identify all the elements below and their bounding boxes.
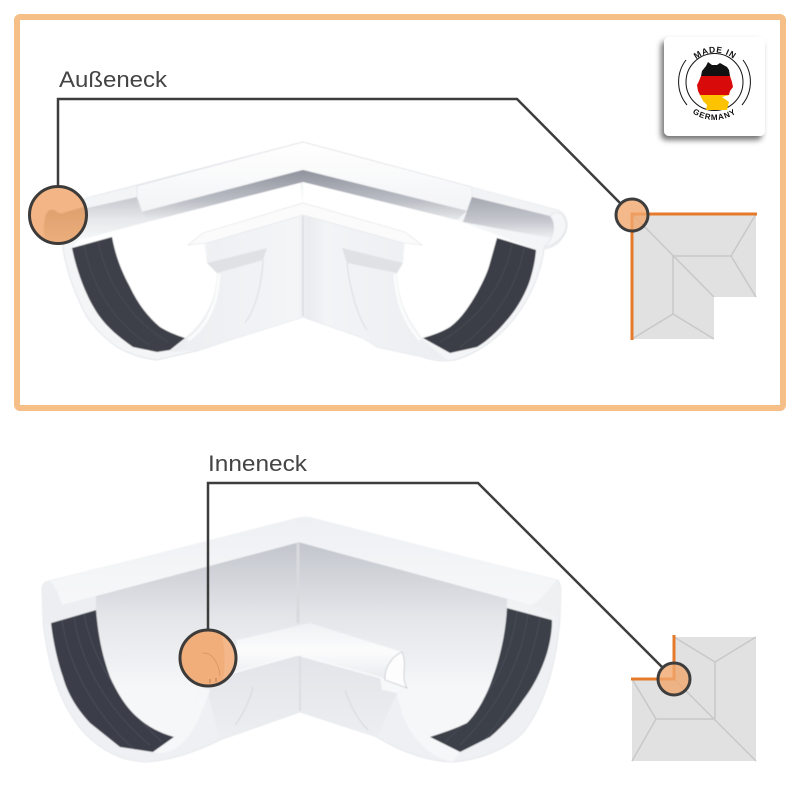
front body	[170, 215, 447, 360]
gutter silhouette	[60, 142, 567, 361]
badge text: germany: GERMANY	[693, 108, 734, 120]
left rim lip	[42, 581, 96, 623]
left tab	[207, 248, 267, 273]
body crease	[302, 216, 304, 316]
badge rings	[686, 54, 743, 110]
roof diagram: inner corner	[631, 635, 756, 761]
right rim lip	[530, 580, 561, 618]
vertical corner shade	[296, 543, 300, 623]
front body below rail	[207, 655, 407, 740]
highlight circle: inner diagram corner	[658, 663, 690, 695]
germany map	[697, 62, 733, 110]
leader line: Außeneck	[58, 99, 621, 204]
badge: Made in Germany	[656, 36, 766, 144]
right tab	[342, 248, 403, 273]
panel frame: Außeneck	[17, 17, 783, 408]
faint joint arc	[235, 687, 368, 730]
right front lip	[397, 688, 460, 762]
label: Inneneck: Inneneck	[208, 451, 308, 476]
inner trough	[51, 542, 552, 737]
left channel	[80, 197, 147, 240]
lip highlights	[188, 274, 420, 340]
right seal	[423, 238, 536, 353]
lip above right seal	[507, 599, 560, 620]
top rim	[45, 517, 557, 605]
label: Außeneck: Außeneck	[59, 67, 168, 92]
right interior	[303, 180, 536, 353]
left dark seal	[51, 610, 174, 752]
top roll	[137, 142, 472, 212]
rail highlight line	[233, 655, 382, 678]
gutter body	[42, 517, 561, 762]
inner rail top	[188, 203, 422, 245]
badge text: made in: MADE IN	[693, 46, 736, 59]
rail end	[385, 652, 407, 688]
right rim	[472, 187, 557, 216]
left interior	[72, 183, 303, 352]
left seal	[72, 237, 185, 352]
central groove	[142, 170, 467, 222]
left rim	[87, 186, 137, 208]
seal ribs	[445, 268, 514, 346]
gutter illustration: inner corner	[42, 517, 561, 762]
right curl	[544, 213, 566, 247]
body crease	[299, 656, 301, 711]
left front lip	[153, 687, 210, 753]
roof diagram: outer corner	[632, 214, 757, 340]
highlight circle: outer diagram corner	[616, 199, 648, 231]
rail foot	[380, 677, 407, 693]
right channel	[463, 197, 554, 238]
faint joint arcs	[245, 260, 367, 330]
highlight circle: outer gutter corner	[30, 186, 90, 247]
leader line: Inneneck	[208, 483, 662, 667]
right dark seal	[430, 608, 552, 752]
gutter illustration: outer corner	[60, 142, 567, 361]
inner rail	[233, 623, 402, 680]
seal ribs	[62, 611, 540, 750]
highlight circle: inner gutter corner	[180, 630, 240, 686]
